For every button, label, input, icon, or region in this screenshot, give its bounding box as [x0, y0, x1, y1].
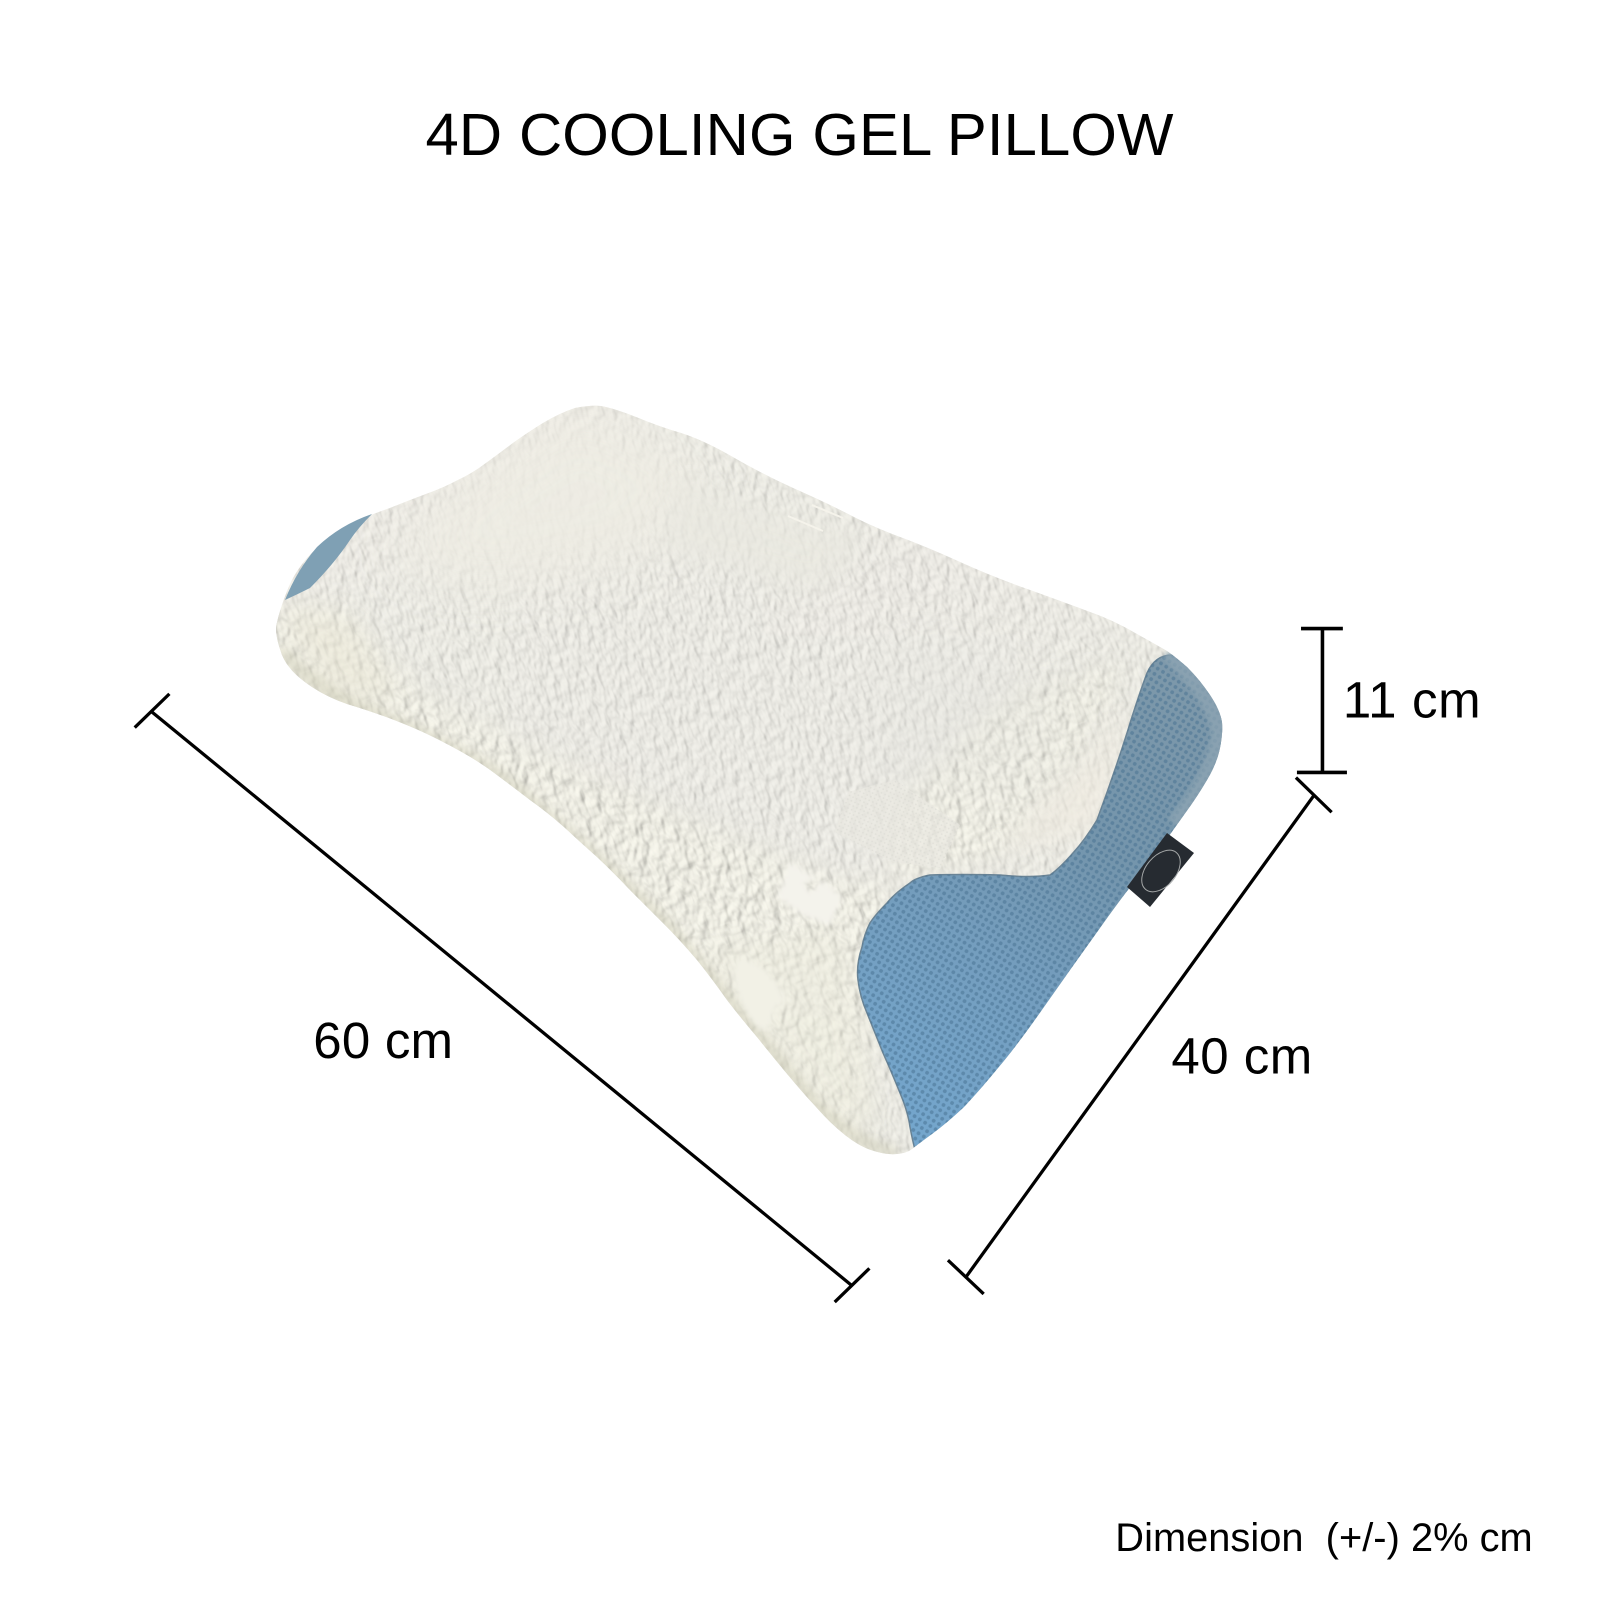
- embossed hatched patch: [835, 780, 960, 868]
- embossed stitched lines near top edge: [788, 505, 843, 531]
- dimension line: 40 cm width: [948, 778, 1332, 1294]
- label: 60 cm: 60 cm: [313, 1012, 453, 1069]
- dimension line: 11 cm height: [1297, 629, 1347, 772]
- title: 4D COOLING GEL PILLOW: [426, 101, 1174, 168]
- pillow photo illustration: [276, 406, 1222, 1154]
- pillow fabric cover: [276, 406, 1220, 1154]
- left blue mesh side panel: [285, 514, 372, 600]
- label: 40 cm: 40 cm: [1171, 1027, 1312, 1084]
- fabric emboss marks: [734, 505, 960, 1032]
- dimension tolerance note: Dimension (+/-) 2% cm: [1115, 1516, 1533, 1560]
- dimension line: 60 cm length: [135, 694, 869, 1302]
- infographic canvas: [134, 114, 1530, 1560]
- embossed round logo: [734, 958, 783, 1032]
- pillow brand tag: [1127, 833, 1194, 907]
- embossed square logo: [778, 863, 842, 925]
- right blue mesh side panel: [856, 650, 1222, 1148]
- label: 11 cm: 11 cm: [1343, 671, 1481, 728]
